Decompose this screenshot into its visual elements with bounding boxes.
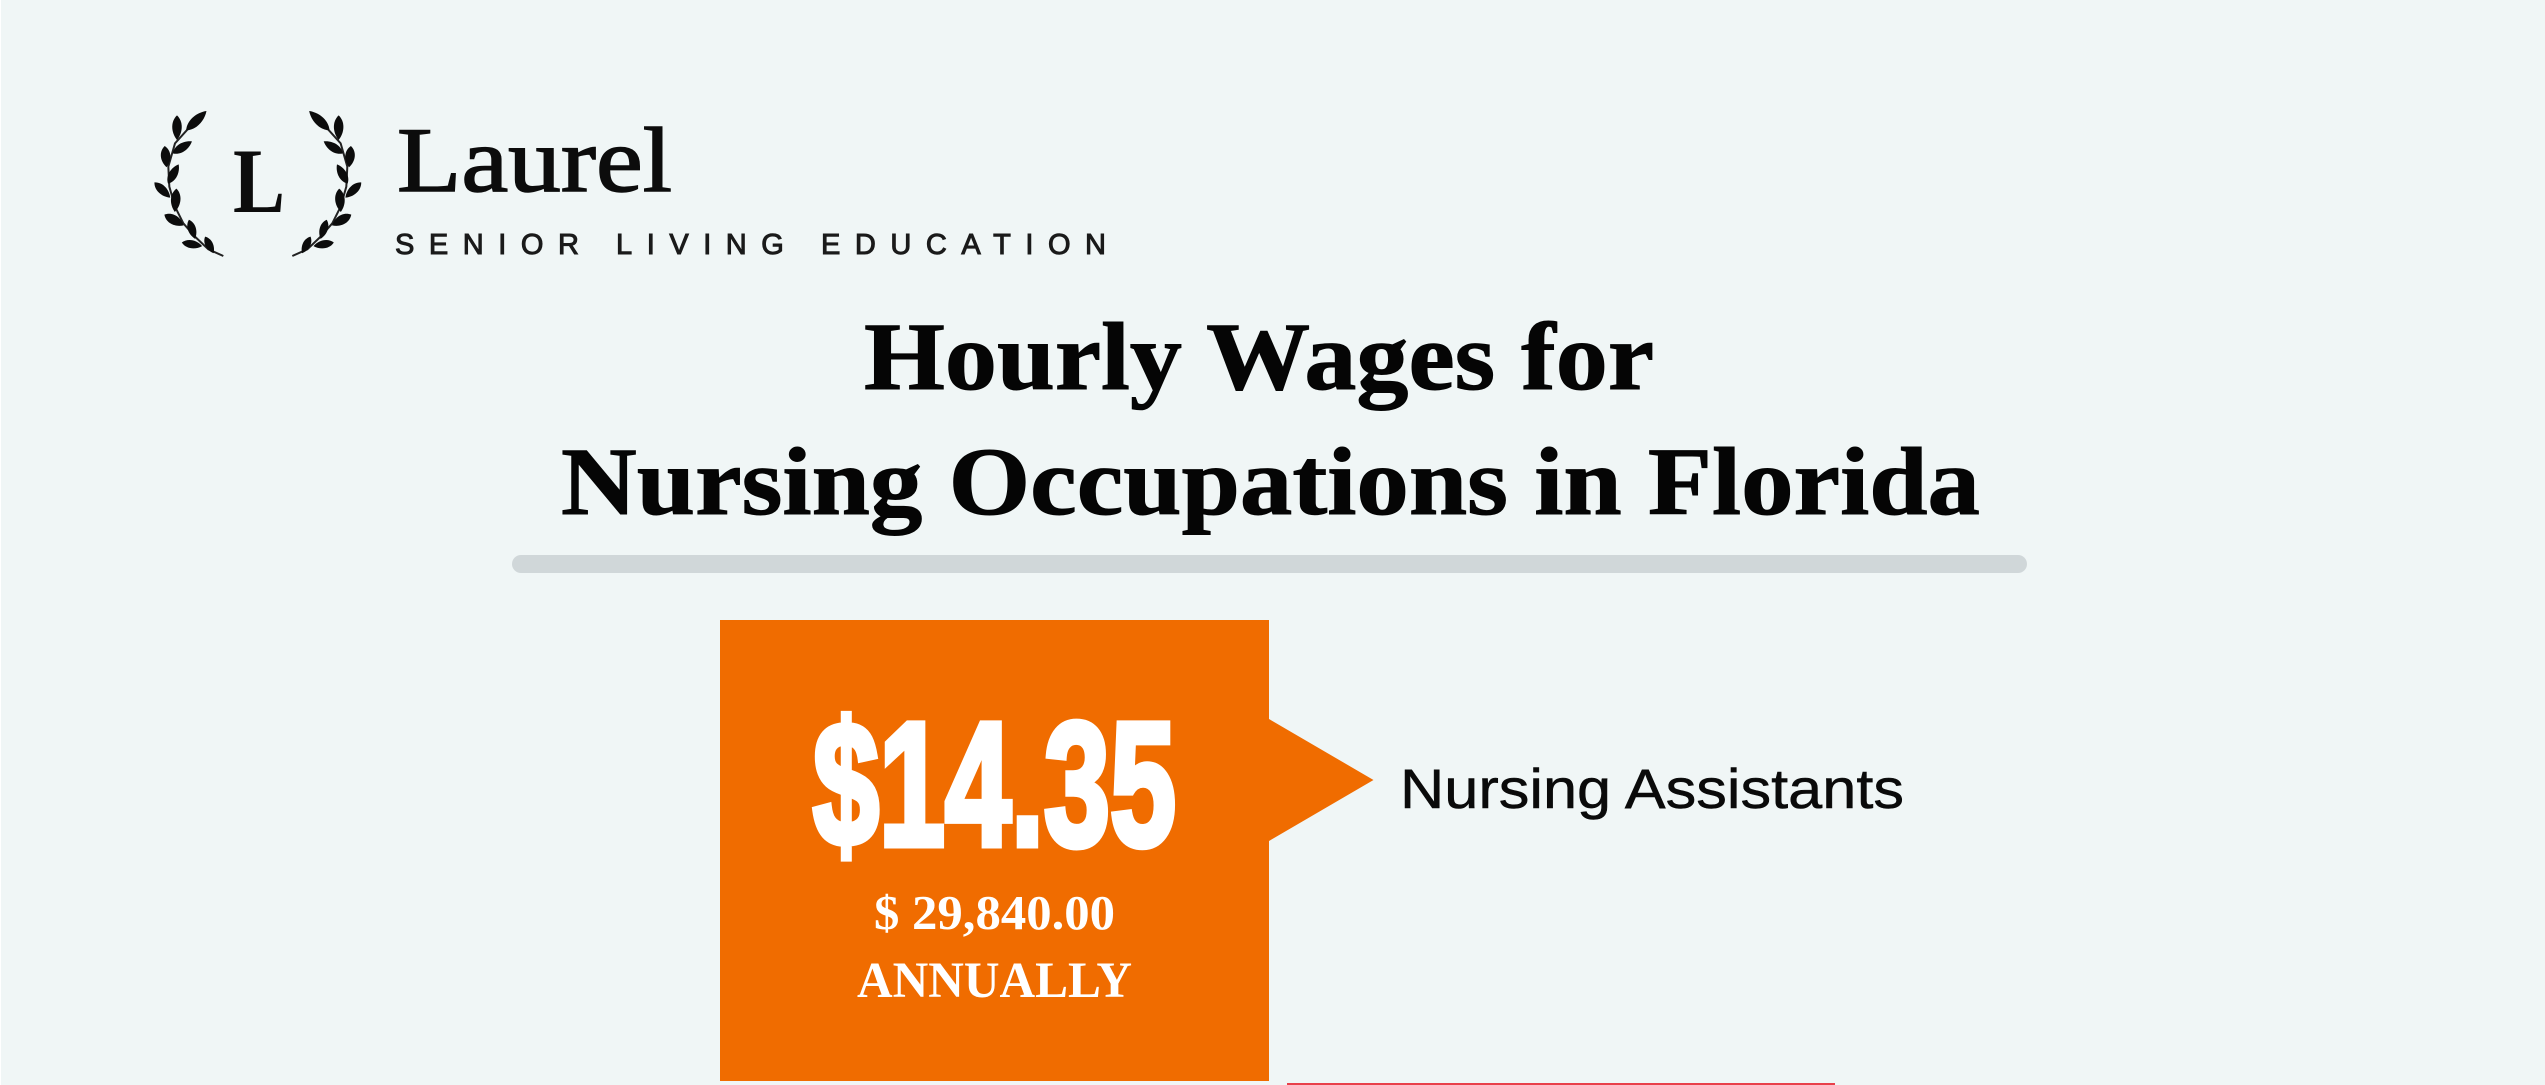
logo monogram L: L — [233, 130, 285, 232]
icon: laurel wreath — [151, 108, 364, 256]
logo tagline: SENIOR LIVING EDUCATION — [395, 229, 1106, 261]
occupation label: Nursing Assistants — [1400, 757, 1904, 820]
panel: nursing assistants wage — [720, 620, 1904, 1081]
title divider — [512, 555, 2027, 573]
hourly wage: $14.35 — [813, 687, 1176, 883]
title — [561, 303, 1980, 535]
next panel top edge — [1287, 1083, 1835, 1085]
title: Hourly Wages for — [864, 303, 1654, 410]
annually label: ANNUALLY — [857, 953, 1132, 1009]
orange callout with arrow — [720, 620, 1374, 1081]
annual salary: $ 29,840.00 — [874, 885, 1115, 940]
logo name: Laurel — [397, 109, 672, 211]
title: Nursing Occupations in Florida — [561, 428, 1980, 535]
logo: Laurel Senior Living Education — [151, 108, 1106, 261]
